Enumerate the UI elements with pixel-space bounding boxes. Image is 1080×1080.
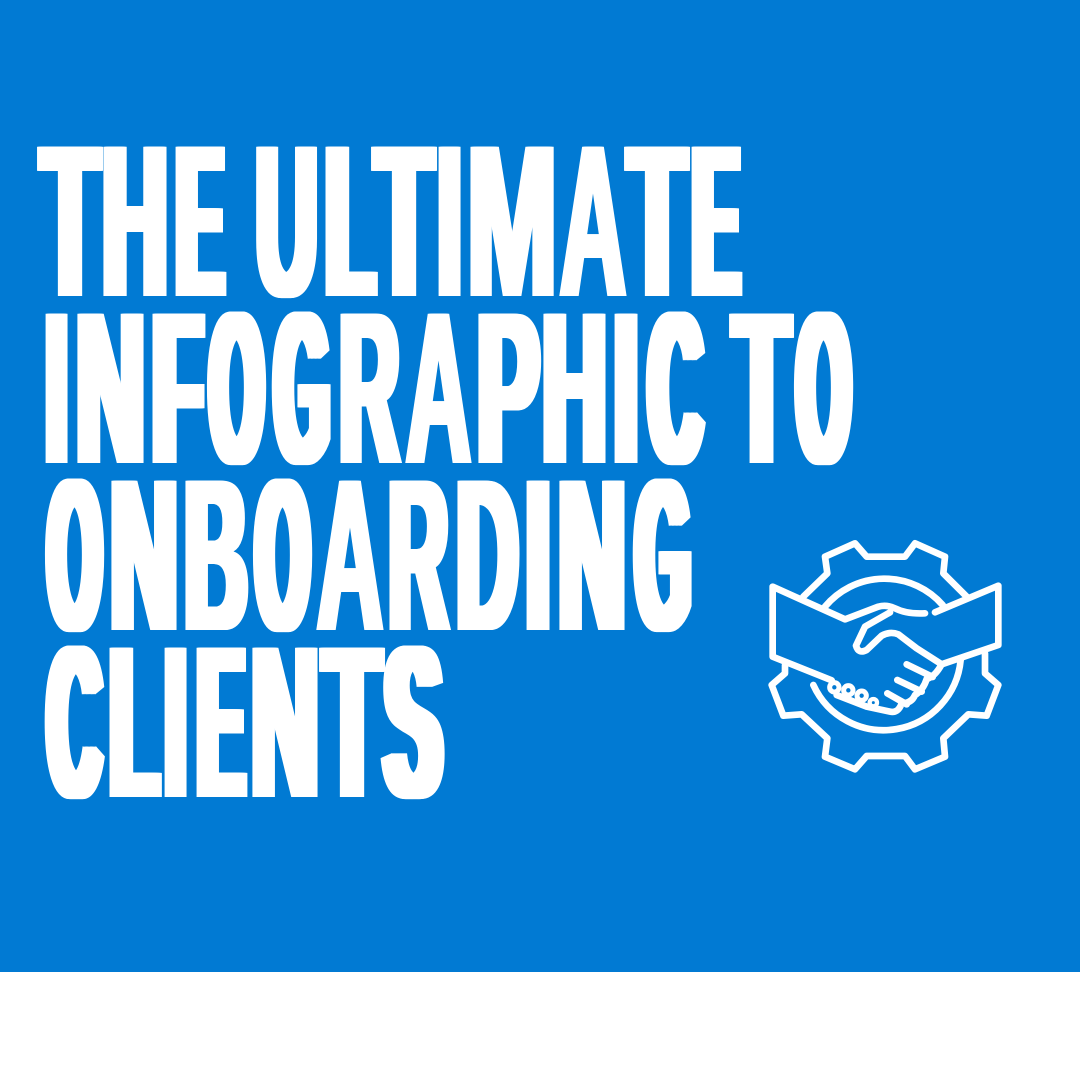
gear outline bbox=[772, 543, 998, 769]
title line 4: S bbox=[386, 601, 440, 843]
title line 3: N bbox=[111, 434, 177, 676]
title line 2: N bbox=[77, 267, 144, 509]
title line 3: I bbox=[526, 434, 550, 676]
title line 2: O bbox=[210, 267, 263, 509]
title line 4: C bbox=[48, 601, 100, 843]
title line 4: N bbox=[252, 601, 318, 843]
title line 1: A bbox=[560, 100, 626, 342]
title line 1: I bbox=[438, 100, 461, 342]
title line 3: R bbox=[389, 434, 448, 676]
title line 1: L bbox=[327, 100, 374, 342]
title line 2: A bbox=[406, 267, 471, 509]
title line 3: N bbox=[559, 434, 625, 676]
title line 2 bbox=[45, 267, 854, 509]
title line 1: M bbox=[467, 100, 557, 342]
title line 3: D bbox=[457, 434, 518, 676]
title line 3: O bbox=[256, 434, 309, 676]
right hand and cuff bbox=[856, 586, 998, 664]
title line 2: P bbox=[478, 267, 539, 509]
title line 3: B bbox=[185, 434, 247, 676]
title line 4 bbox=[44, 601, 445, 843]
title line 3 bbox=[44, 434, 692, 676]
title line 1: T bbox=[375, 100, 433, 342]
title line 4: E bbox=[198, 601, 244, 843]
title line 4: I bbox=[164, 601, 187, 843]
title line 2: O bbox=[797, 267, 850, 509]
title line 1: T bbox=[41, 100, 99, 342]
title line 2: G bbox=[275, 267, 329, 509]
inner circle arcs bbox=[813, 579, 961, 730]
title line 4: T bbox=[323, 601, 381, 843]
title line 1 bbox=[37, 100, 742, 342]
title line 2: T bbox=[733, 267, 790, 509]
title line 3: A bbox=[317, 434, 383, 676]
title line 2: F bbox=[154, 267, 202, 509]
title line 2: I bbox=[45, 267, 68, 509]
title line 2: I bbox=[614, 267, 638, 509]
title line 2: H bbox=[543, 267, 606, 509]
title line 3: G bbox=[636, 434, 690, 676]
title line 1: H bbox=[103, 100, 167, 342]
title line 3: O bbox=[48, 434, 101, 676]
title line 1: U bbox=[256, 100, 317, 342]
left hand and cuff bbox=[773, 587, 942, 712]
title line 2: C bbox=[649, 267, 701, 509]
title line 1: E bbox=[693, 100, 739, 342]
icon: handshake inside gear bbox=[768, 540, 1002, 773]
title line 1: E bbox=[177, 100, 223, 342]
title line 4: L bbox=[111, 601, 158, 843]
title line 1: T bbox=[628, 100, 686, 342]
title line 2: R bbox=[340, 267, 399, 509]
